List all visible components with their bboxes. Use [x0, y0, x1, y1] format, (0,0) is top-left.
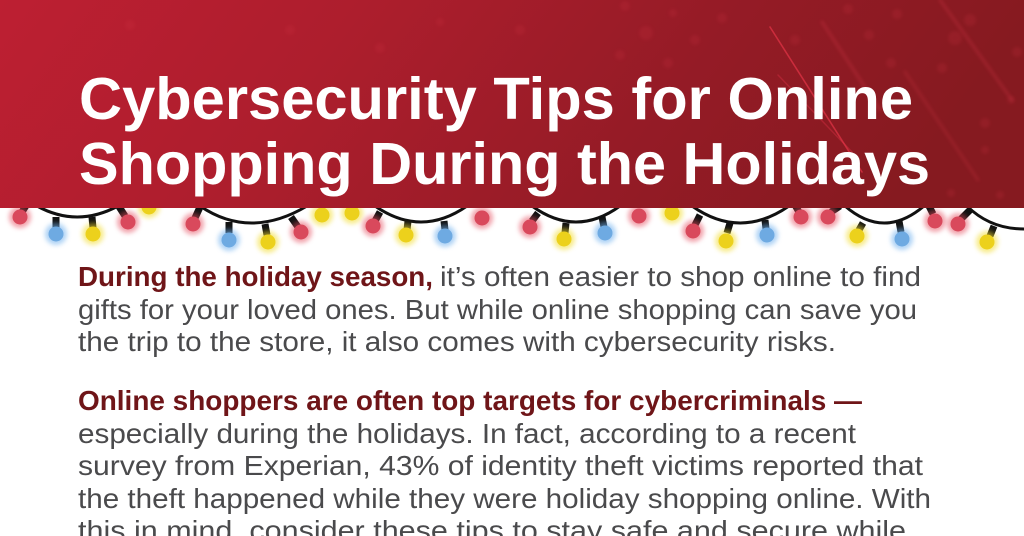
second paragraph: Online shoppers are often top targets for cybercriminals — [78, 385, 862, 416]
intro paragraph: gifts for your loved ones. But while online shopping can save you [78, 294, 917, 325]
second paragraph: especially during the holidays. In fact, according to a recent [78, 418, 856, 449]
title: Shopping During the Holidays [79, 131, 930, 197]
intro paragraph: During the holiday season, [78, 261, 433, 292]
intro paragraph: the trip to the store, it also comes with cybersecurity risks. [78, 326, 836, 357]
title [79, 66, 930, 197]
string lights [9, 196, 1024, 253]
second paragraph [78, 385, 931, 536]
second paragraph: the theft happened while they were holiday shopping online. With [78, 483, 931, 514]
intro paragraph: it’s often easier to shop online to find [440, 261, 921, 292]
intro paragraph [78, 261, 921, 357]
second paragraph: survey from Experian, 43% of identity theft victims reported that [78, 450, 923, 481]
header banner [0, 0, 1024, 208]
title: Cybersecurity Tips for Online [79, 66, 913, 132]
